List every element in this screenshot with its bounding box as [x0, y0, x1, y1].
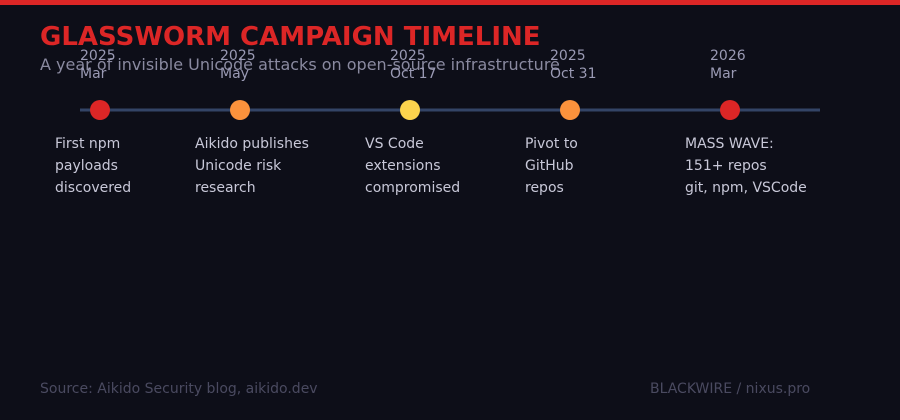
event: 2025 Oct 17: compromised — [365, 180, 460, 196]
title: GLASSWORM CAMPAIGN TIMELINE — [40, 22, 541, 52]
event: 2025 May — [195, 48, 309, 196]
event: 2025 Oct 31: GitHub — [525, 158, 574, 174]
event: 2025 Oct 17: 2025 — [390, 48, 426, 64]
event: 2025 Mar: Mar — [80, 66, 107, 82]
event: 2025 Oct 31: repos — [525, 180, 564, 196]
brand footer: BLACKWIRE / nixus.pro — [650, 381, 810, 397]
event: 2025 Oct 31: Oct 31 — [550, 66, 596, 82]
event: 2025 May: May — [220, 66, 249, 82]
event: 2026 Mar — [685, 48, 807, 196]
event: 2025 Mar: First npm — [55, 136, 120, 152]
event: 2025 May: 2025 — [220, 48, 256, 64]
event: 2025 Oct 31: Pivot to — [525, 136, 578, 152]
subtitle: A year of invisible Unicode attacks on open-source infrastructure — [40, 55, 560, 74]
timeline axis — [80, 108, 820, 112]
event: 2025 Oct 17: extensions — [365, 158, 441, 174]
event: 2025 Oct 31 — [525, 48, 596, 196]
event: 2025 Mar — [55, 48, 131, 196]
event: 2025 Oct 17: VS Code — [365, 136, 424, 152]
event: 2026 Mar: 2026 — [710, 48, 746, 64]
event: 2025 May: Unicode risk — [195, 158, 282, 174]
event: 2026 Mar: 151+ repos — [685, 158, 767, 174]
event: 2025 Oct 31: 2025 — [550, 48, 586, 64]
event: 2025 Mar: payloads — [55, 158, 118, 174]
event: 2025 Mar: 2025 — [80, 48, 116, 64]
source footer: Source: Aikido Security blog, aikido.dev — [40, 381, 318, 397]
event: 2025 Oct 17: Oct 17 — [390, 66, 436, 82]
event: 2025 Oct 17 — [365, 48, 460, 196]
event: 2025 May: research — [195, 180, 256, 196]
event: 2026 Mar: Mar — [710, 66, 737, 82]
event: 2025 Mar: discovered — [55, 180, 131, 196]
event: 2026 Mar: git, npm, VSCode — [685, 180, 807, 196]
event: 2025 May: Aikido publishes — [195, 136, 309, 152]
event: 2026 Mar: MASS WAVE: — [685, 136, 774, 152]
